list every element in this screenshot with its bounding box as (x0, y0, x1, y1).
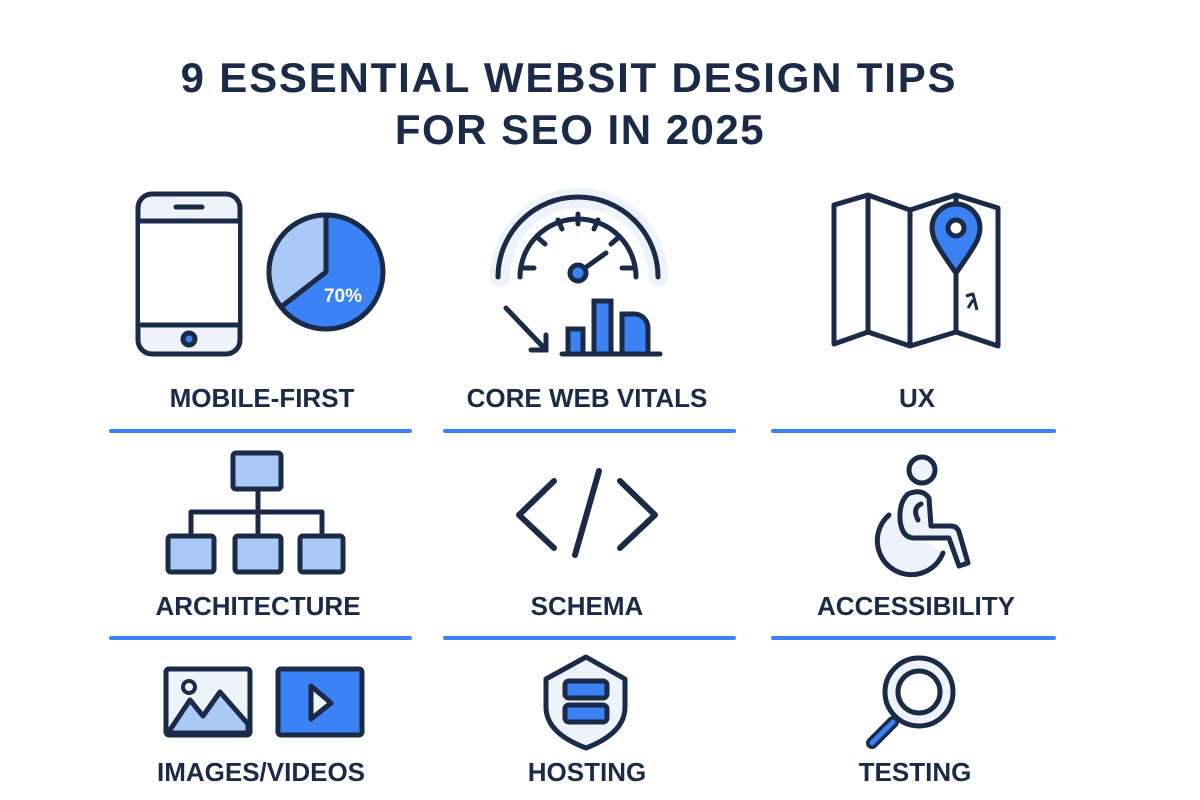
label: accessibility: ACCESSIBILITY (817, 591, 1015, 621)
icon: mobile phone with pie chart: 70% (324, 286, 362, 307)
icon: speedometer with chart (498, 197, 660, 354)
icon: map with pin (834, 195, 998, 346)
icon: hosting shield (546, 657, 625, 748)
title: 9 ESSENTIAL WEBSIT DESIGN TIPS (181, 54, 957, 101)
title (181, 54, 957, 153)
label: images/videos: IMAGES/VIDEOS (157, 757, 365, 787)
icon: accessibility wheelchair (877, 457, 968, 575)
title: FOR SEO IN 2025 (395, 106, 765, 153)
label: hosting: HOSTING (528, 757, 646, 787)
icon: code tag (519, 471, 655, 555)
label: schema: SCHEMA (531, 591, 644, 621)
label: mobile-first: MOBILE-FIRST (170, 383, 355, 413)
icon: site architecture (168, 453, 343, 572)
icon: mobile phone with pie chart (138, 194, 383, 354)
label: ux: UX (899, 383, 936, 413)
icon: magnifier (872, 658, 953, 743)
label: architecture: ARCHITECTURE (155, 591, 361, 621)
icon: image and video (166, 669, 362, 735)
label: testing: TESTING (859, 757, 971, 787)
label: core web vitals: CORE WEB VITALS (467, 383, 707, 413)
